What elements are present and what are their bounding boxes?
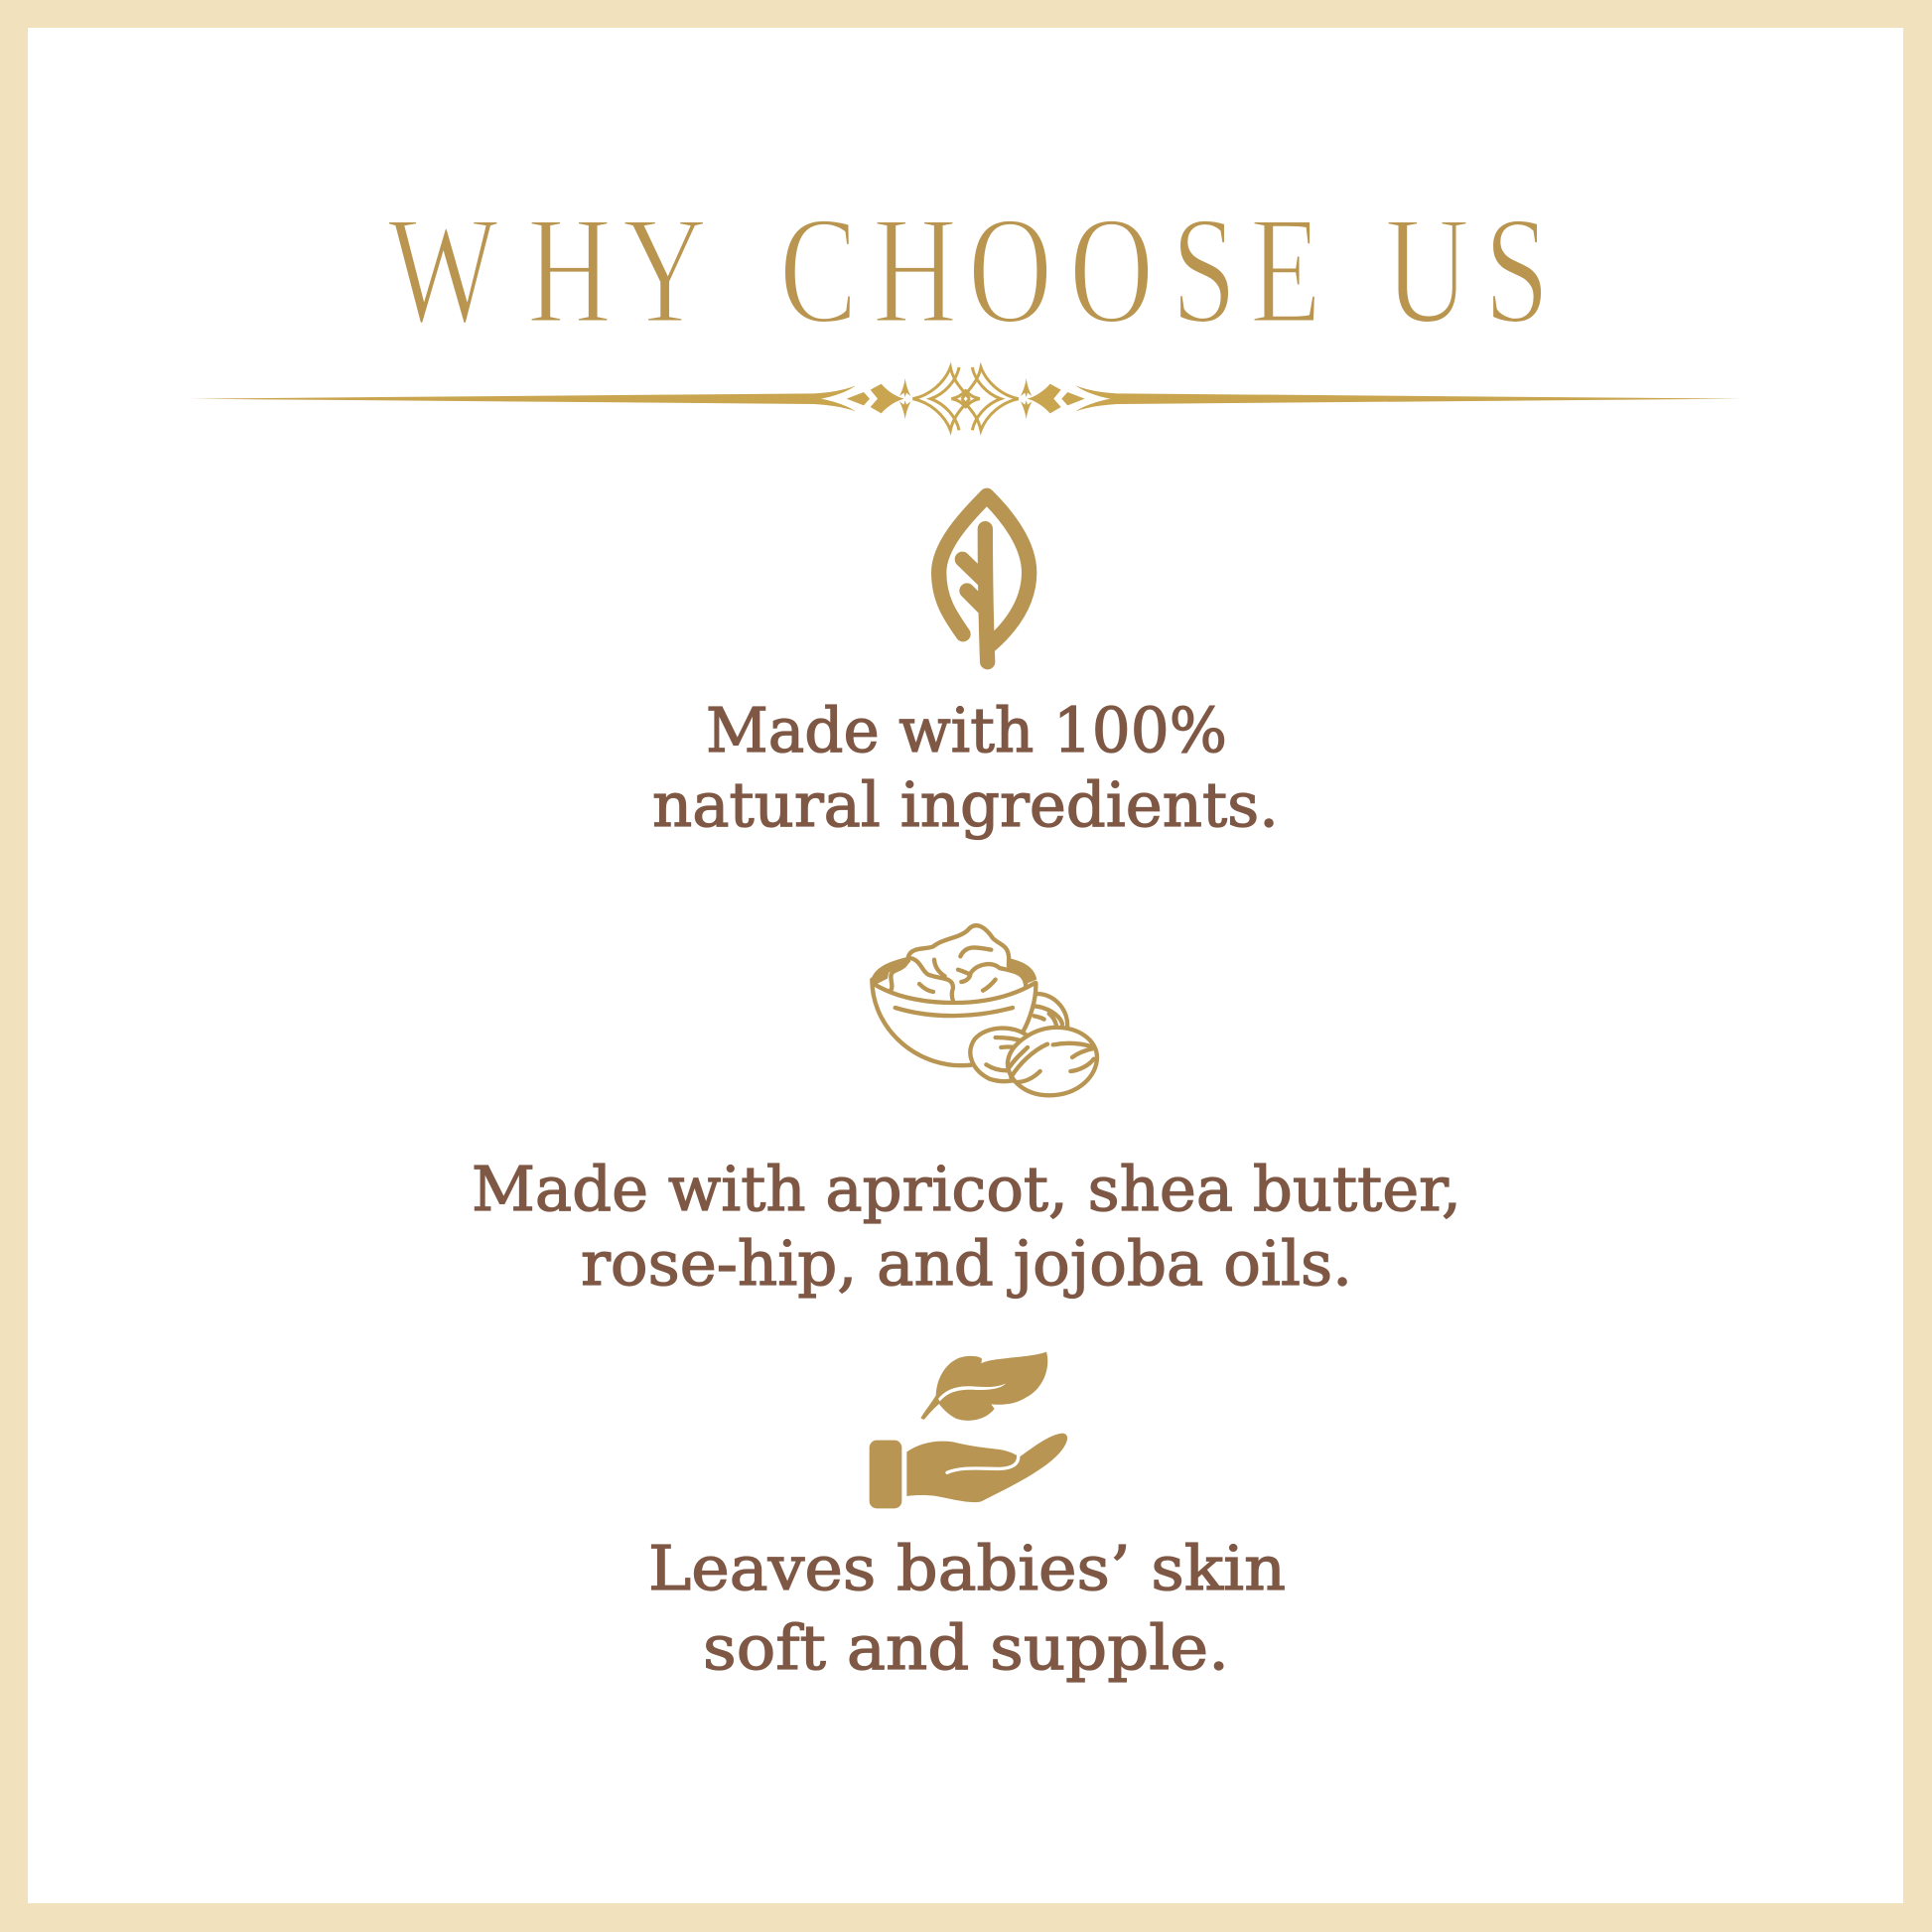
title: WHY CHOOSE US (388, 185, 1550, 355)
text: natural ingredients: natural ingredients. (652, 768, 1279, 841)
text: soft skin: Leaves babies’ skin (648, 1532, 1286, 1604)
text: oils: rose-hip, and jojoba oils. (581, 1227, 1352, 1300)
text: soft skin (648, 1532, 1286, 1684)
text: natural ingredients (652, 694, 1279, 841)
icon: hand holding leaf (870, 1352, 1067, 1508)
ornamental divider (191, 367, 1740, 430)
icon: bowl of shea butter and nuts (871, 925, 1097, 1095)
text: natural ingredients: Made with 100% (706, 694, 1227, 766)
text: oils (472, 1153, 1461, 1300)
text: soft skin: soft and supple. (703, 1611, 1229, 1684)
icon: leaf outline (939, 495, 1030, 662)
text: oils: Made with apricot, shea butter, (472, 1153, 1461, 1225)
